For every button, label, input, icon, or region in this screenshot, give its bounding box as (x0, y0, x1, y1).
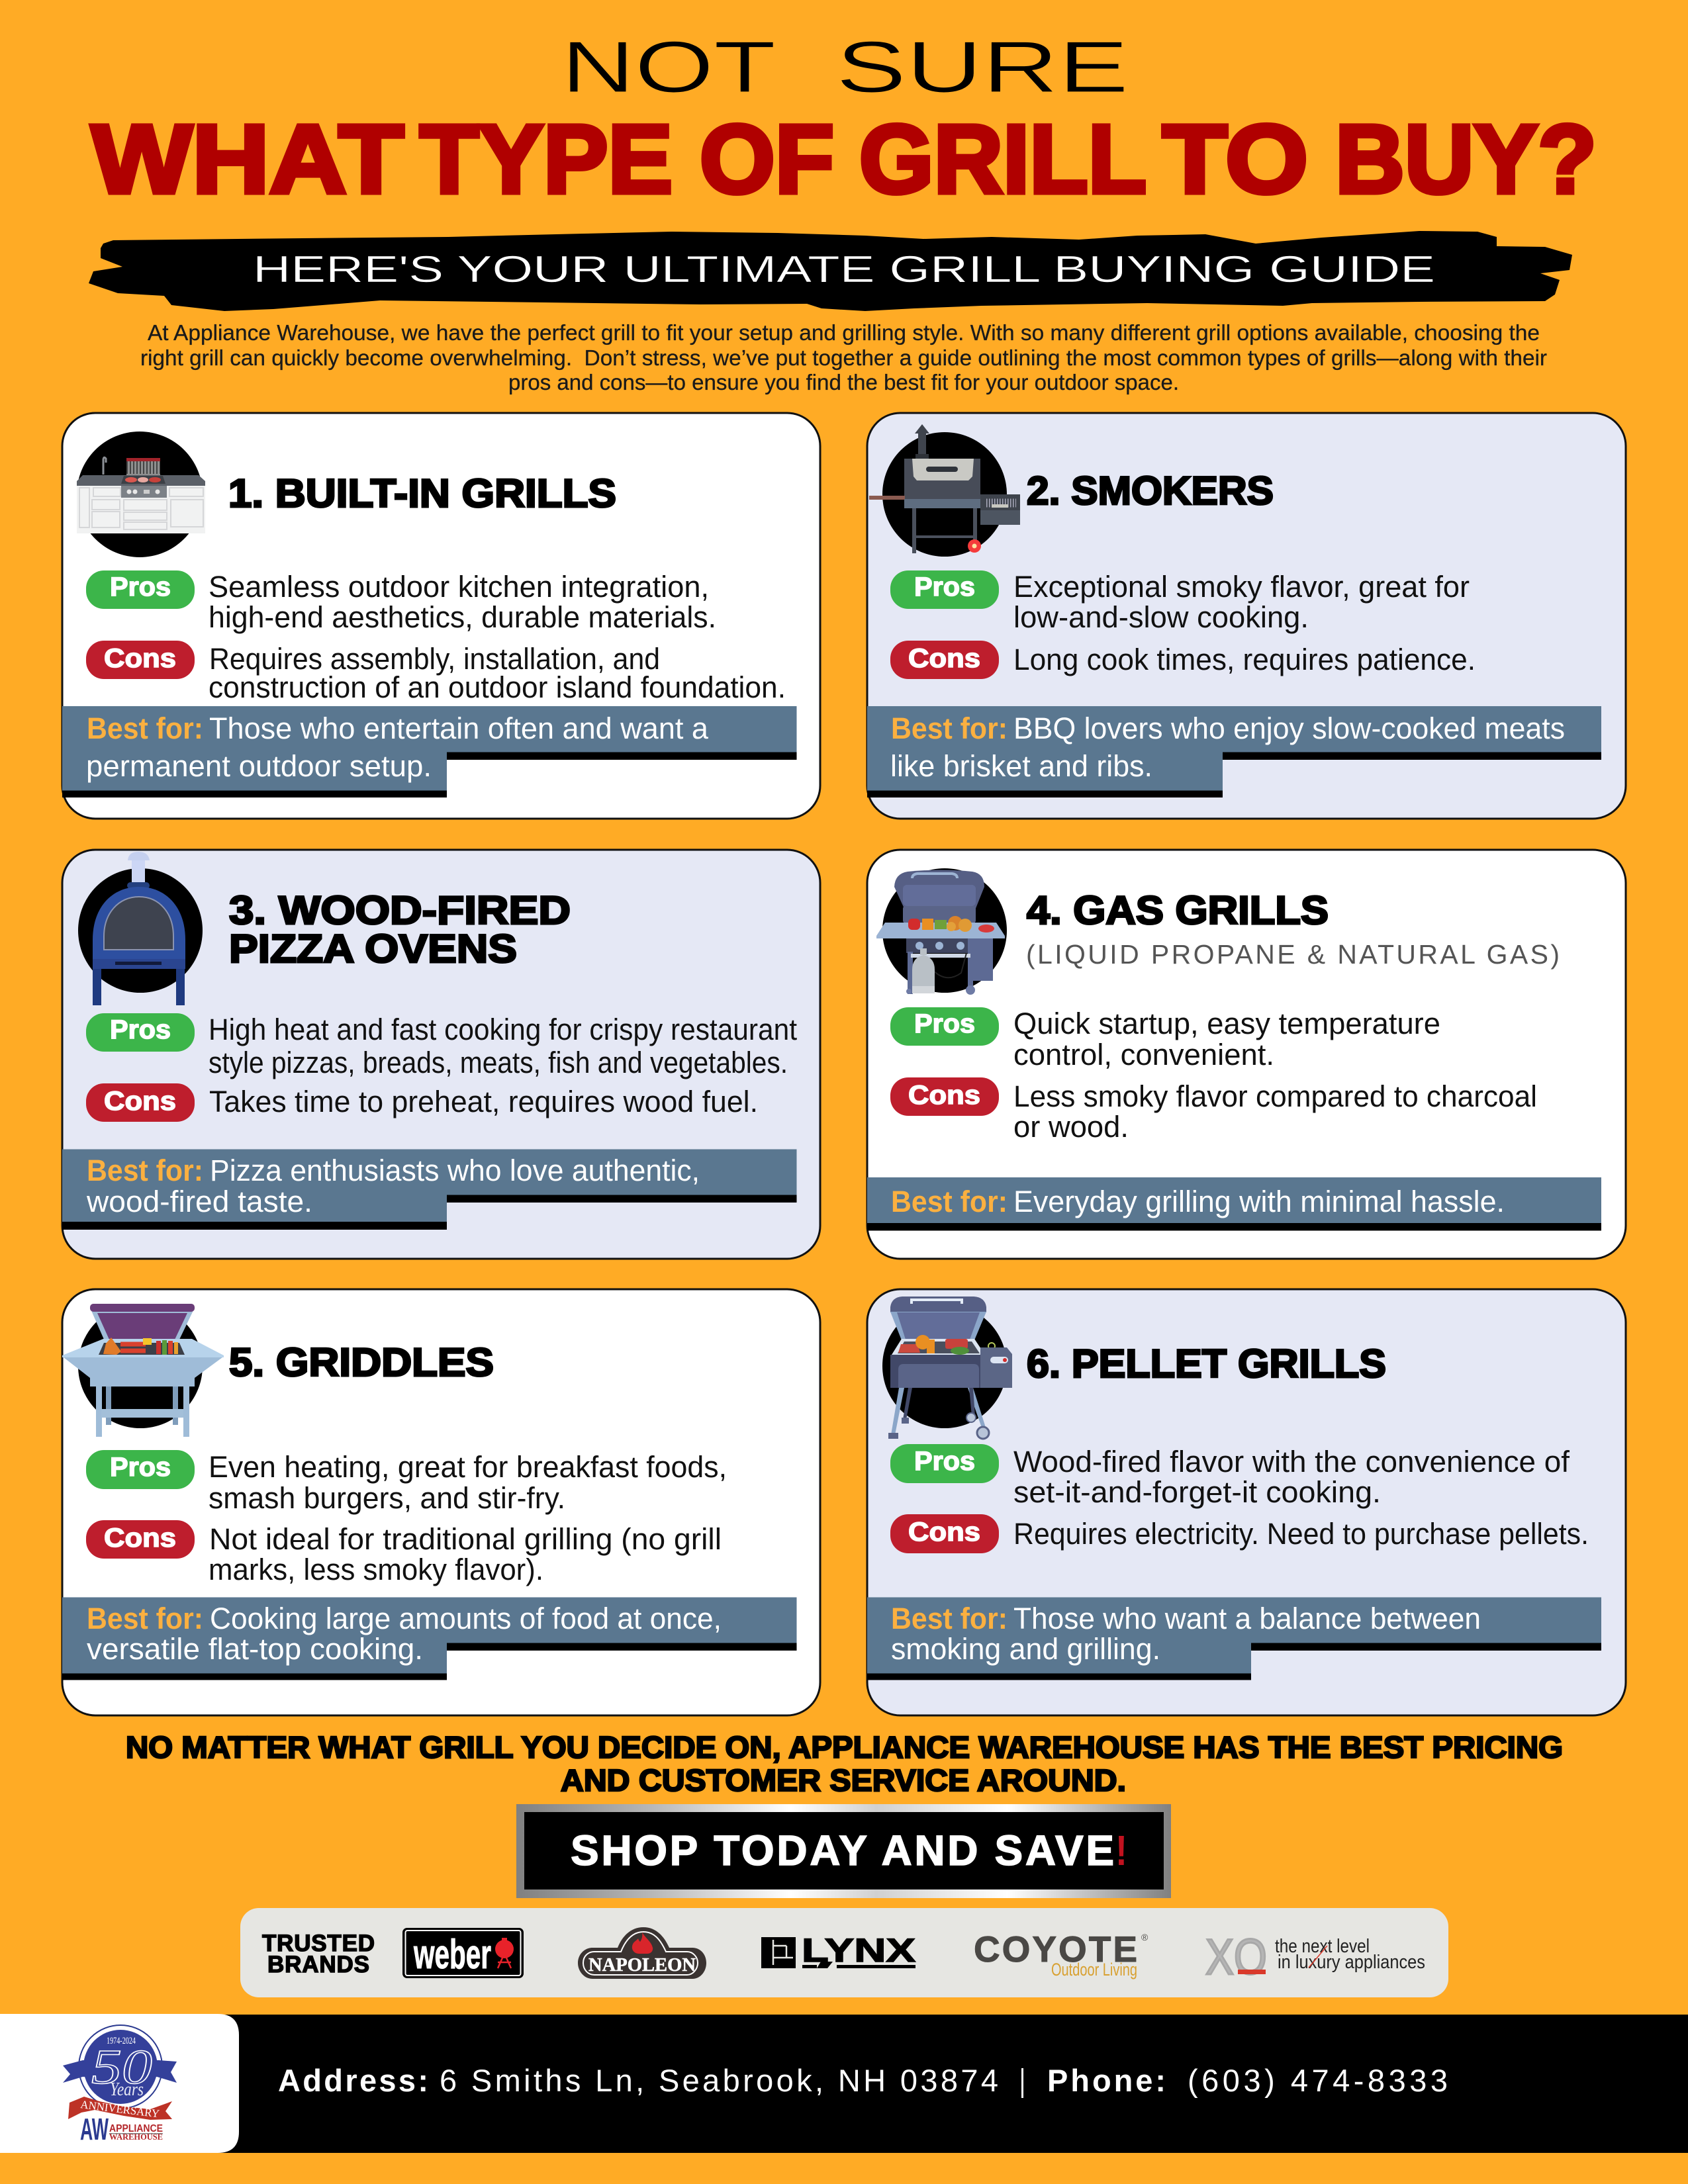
icon: built-in grill (77, 432, 205, 557)
banner: ultimate grill buying guide (89, 231, 1572, 311)
logo: xo (1205, 1929, 1425, 1985)
best for: Pizza enthusiasts who love authentic, (210, 1154, 700, 1187)
logo tab: appliance warehouse 50 years: Years (110, 2079, 144, 2100)
cons: Cons (104, 1524, 176, 1553)
logo tab: appliance warehouse 50 years: AW (80, 2112, 109, 2146)
logo: coyote: Outdoor Living (1051, 1960, 1137, 1979)
pros: control, convenient. (1013, 1038, 1274, 1071)
closing statement (126, 1730, 1563, 1797)
pros: Pros (110, 572, 171, 602)
logo: xo: the next level (1275, 1936, 1370, 1957)
heading: 3. WOOD-FIRED (229, 888, 571, 933)
best for (867, 706, 1601, 797)
pros (890, 570, 1470, 634)
best for (867, 1598, 1601, 1680)
title: what type of grill to buy: WHAT (91, 105, 404, 214)
intro paragraph: right grill can quickly become overwhelming. Don’t stress, we’ve put together a guide outlining the most common types of grills—along with their (140, 345, 1547, 370)
cons: Cons (104, 644, 176, 673)
title: not sure: NOT (561, 26, 776, 108)
icon: pizza oven (78, 852, 203, 1005)
best for: Those who want a balance between (1013, 1602, 1481, 1635)
logo tab: appliance warehouse 50 years: 50 (91, 2040, 152, 2095)
icon: griddle (62, 1304, 224, 1437)
address and phone: Address: (278, 2063, 428, 2098)
pros: Pros (914, 1447, 975, 1476)
pros: set-it-and-forget-it cooking. (1013, 1475, 1381, 1509)
logo: xo: XO (1205, 1929, 1267, 1985)
panel: smokers (867, 413, 1626, 819)
cons: Requires assembly, installation, and (209, 642, 660, 676)
best for: Best for: (891, 711, 1008, 745)
cons: Cons (908, 644, 980, 673)
cons: Cons (908, 1518, 980, 1547)
best for: Those who entertain often and want a (209, 711, 709, 745)
heading: 1. BUILT-IN GRILLS (228, 471, 616, 516)
button: shop today and save: ! (1115, 1827, 1127, 1874)
logo tab: appliance warehouse 50 years: 1974-2024 (107, 2036, 136, 2046)
title: what type of grill to buy: BUY? (1335, 105, 1597, 214)
best for (867, 1177, 1601, 1231)
cons: Cons (908, 1081, 980, 1110)
pros: Pros (110, 1015, 171, 1044)
logo tab: appliance warehouse 50 years (0, 2014, 239, 2153)
pros (86, 570, 716, 634)
pros (86, 1013, 797, 1079)
cons (890, 641, 1476, 679)
cons: Cons (104, 1087, 176, 1116)
logo: coyote: COYOTE (974, 1929, 1137, 1970)
logo tab: appliance warehouse 50 years: WAREHOUSE (109, 2132, 163, 2142)
pros: Exceptional smoky flavor, great for (1013, 570, 1470, 604)
icon: pellet grill (882, 1297, 1012, 1439)
heading: 6. PELLET GRILLS (1027, 1342, 1386, 1386)
title: what type of grill to buy: TO (1162, 105, 1308, 214)
pros: high-end aesthetics, durable materials. (209, 600, 716, 634)
address and phone: (603) 474-8333 (1188, 2063, 1448, 2098)
cons (890, 1514, 1589, 1553)
best for: Best for: (891, 1602, 1008, 1635)
label: trusted brands (262, 1931, 375, 1978)
best for: permanent outdoor setup. (86, 749, 432, 783)
panel: griddles (62, 1289, 820, 1715)
logo: napoleon: NAPOLEON (588, 1954, 696, 1976)
best for: Best for: (87, 711, 203, 745)
cons: marks, less smoky flavor). (209, 1553, 543, 1586)
cons: Not ideal for traditional grilling (no grill (209, 1522, 722, 1556)
cons: Long cook times, requires patience. (1013, 643, 1476, 676)
best for: like brisket and ribs. (890, 749, 1152, 783)
logo tab: appliance warehouse 50 years: APPLIANCE (109, 2123, 163, 2134)
logo: napoleon (578, 1927, 706, 1979)
address and phone: Phone: (1047, 2063, 1166, 2098)
pros (890, 1007, 1440, 1071)
intro paragraph (140, 320, 1547, 394)
pros: smash burgers, and stir-fry. (209, 1481, 565, 1515)
pros: Wood-fired flavor with the convenience of (1013, 1445, 1570, 1479)
best for (62, 706, 797, 797)
title: not sure (561, 26, 1129, 108)
panel: gas grills (867, 850, 1626, 1259)
pros: Quick startup, easy temperature (1013, 1007, 1440, 1040)
best for (62, 1598, 797, 1680)
best for: BBQ lovers who enjoy slow-cooked meats (1013, 711, 1565, 745)
footer bar (0, 2014, 1688, 2153)
cons (86, 641, 786, 704)
best for: Everyday grilling with minimal hassle. (1013, 1185, 1505, 1218)
logo: weber: weber (413, 1932, 491, 1978)
title: what type of grill to buy (91, 105, 1597, 214)
cons (890, 1077, 1537, 1144)
best for: Best for: (87, 1154, 203, 1187)
cons (86, 1520, 722, 1586)
best for: wood-fired taste. (86, 1185, 312, 1218)
pros: low-and-slow cooking. (1013, 600, 1309, 634)
address and phone: 6 Smiths Ln, Seabrook, NH 03874 (440, 2063, 998, 2098)
best for (62, 1149, 797, 1230)
heading: PIZZA OVENS (229, 927, 517, 971)
best for: Best for: (891, 1185, 1008, 1218)
best for: smoking and grilling. (891, 1632, 1160, 1666)
pros: style pizzas, breads, meats, fish and vegetables. (209, 1046, 788, 1079)
intro paragraph: At Appliance Warehouse, we have the perfect grill to fit your setup and grilling style. With so many different grill options available, choosing the (148, 320, 1540, 345)
pros: Pros (914, 572, 975, 602)
logo: lynx: LYNX (802, 1932, 915, 1969)
title: what type of grill to buy: GRILL (859, 105, 1147, 214)
address and phone (278, 2063, 1448, 2098)
cons: Less smoky flavor compared to charcoal (1013, 1079, 1537, 1113)
closing statement: NO MATTER WHAT GRILL YOU DECIDE ON, APPLIANCE WAREHOUSE HAS THE BEST PRICING (126, 1730, 1563, 1764)
best for: versatile flat-top cooking. (87, 1632, 423, 1666)
cons: construction of an outdoor island foundation. (209, 670, 786, 704)
intro paragraph: pros and cons—to ensure you find the best fit for your outdoor space. (508, 370, 1179, 394)
logo: xo: in luxury appliances (1278, 1952, 1425, 1973)
heading: (LIQUID PROPANE & NATURAL GAS) (1026, 939, 1560, 970)
logo: lynx (761, 1932, 915, 1969)
pros (890, 1444, 1570, 1509)
closing statement: AND CUSTOMER SERVICE AROUND. (561, 1763, 1126, 1797)
heading (1026, 888, 1560, 970)
button: shop today and save (516, 1804, 1171, 1898)
pros: High heat and fast cooking for crispy restaurant (209, 1013, 797, 1046)
cons: Requires electricity. Need to purchase pellets. (1013, 1517, 1589, 1551)
pros: Seamless outdoor kitchen integration, (209, 570, 709, 604)
heading: 5. GRIDDLES (229, 1340, 494, 1385)
pros: Pros (110, 1453, 171, 1482)
panel: trusted brands (240, 1908, 1448, 1997)
label: trusted brands: TRUSTED (262, 1931, 375, 1956)
label: trusted brands: BRANDS (267, 1952, 369, 1978)
pros (86, 1450, 727, 1515)
heading: 2. SMOKERS (1027, 469, 1274, 513)
pros: Even heating, great for breakfast foods, (209, 1450, 727, 1484)
title: what type of grill to buy: TYPE (420, 105, 673, 214)
panel: wood-fired pizza ovens (62, 850, 820, 1259)
pros: Pros (914, 1009, 975, 1038)
cons: or wood. (1013, 1110, 1129, 1144)
logo tab: appliance warehouse 50 years: ANNIVERSARY (80, 2098, 160, 2120)
panel: pellet grills (867, 1289, 1626, 1715)
best for: Best for: (87, 1602, 203, 1635)
best for: Cooking large amounts of food at once, (210, 1602, 722, 1635)
icon: smoker (869, 424, 1020, 557)
cons: Takes time to preheat, requires wood fuel. (209, 1085, 758, 1118)
title: not sure: SURE (836, 26, 1129, 108)
icon: gas grill (876, 868, 1007, 995)
title: what type of grill to buy: OF (700, 105, 834, 214)
logo: coyote: ® (1141, 1932, 1149, 1942)
heading: 4. GAS GRILLS (1027, 888, 1329, 933)
banner: ultimate grill buying guide: HERE'S YOUR ULTIMATE GRILL BUYING GUIDE (253, 248, 1435, 291)
heading (229, 888, 571, 971)
button: shop today and save: SHOP TODAY AND SAVE (571, 1827, 1114, 1874)
panel: built-in grills (62, 413, 820, 819)
